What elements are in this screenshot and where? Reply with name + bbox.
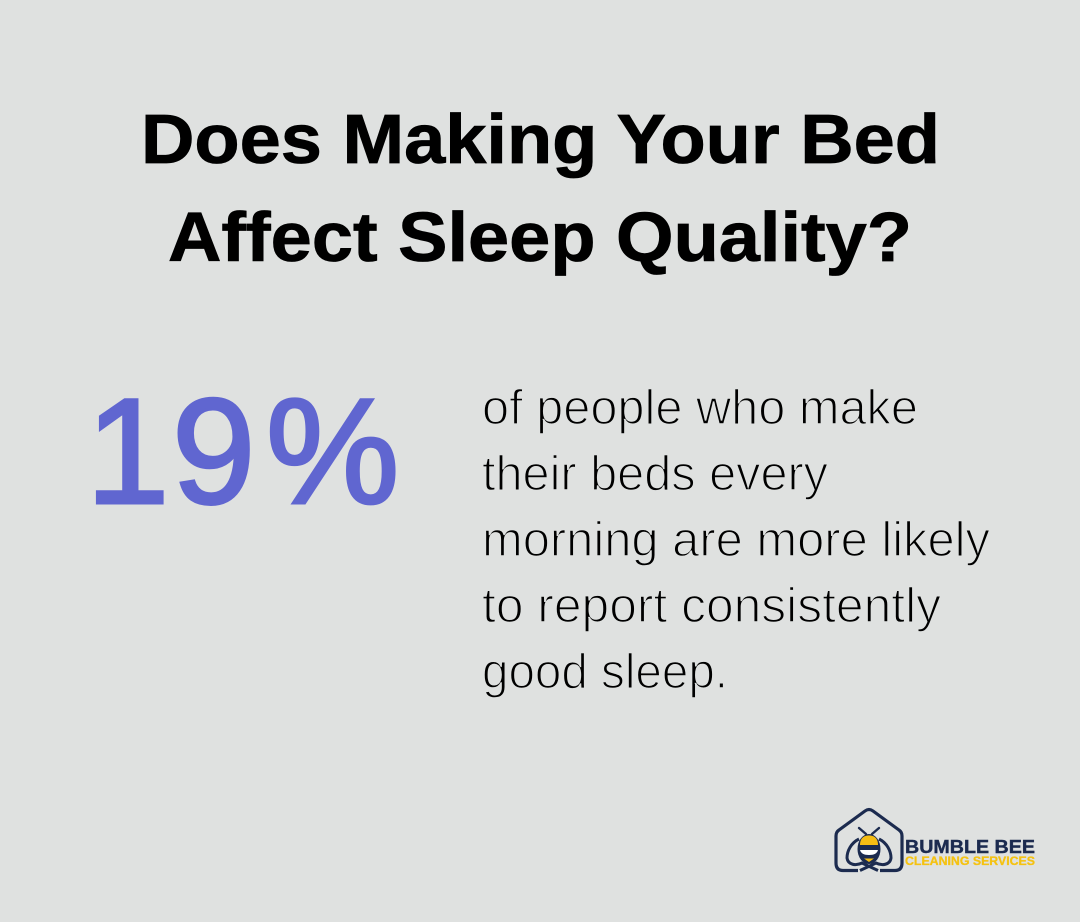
- title: Affect Sleep Quality?: [168, 198, 912, 276]
- description text: [482, 381, 990, 699]
- description text: to report consistently: [482, 579, 941, 633]
- description text: of people who make: [482, 381, 918, 435]
- logo: Bumble Bee Cleaning Services: [836, 810, 1035, 870]
- logo wordmark: BUMBLE BEE: [905, 837, 1035, 857]
- big statistic: 19%: 19%: [86, 367, 399, 535]
- description text: their beds every: [482, 447, 828, 501]
- icon: house with bee: [836, 810, 902, 870]
- description text: good sleep.: [482, 645, 728, 699]
- title: [141, 100, 940, 276]
- title: Does Making Your Bed: [141, 100, 940, 178]
- logo tagline: CLEANING SERVICES: [905, 854, 1035, 868]
- description text: morning are more likely: [482, 513, 990, 567]
